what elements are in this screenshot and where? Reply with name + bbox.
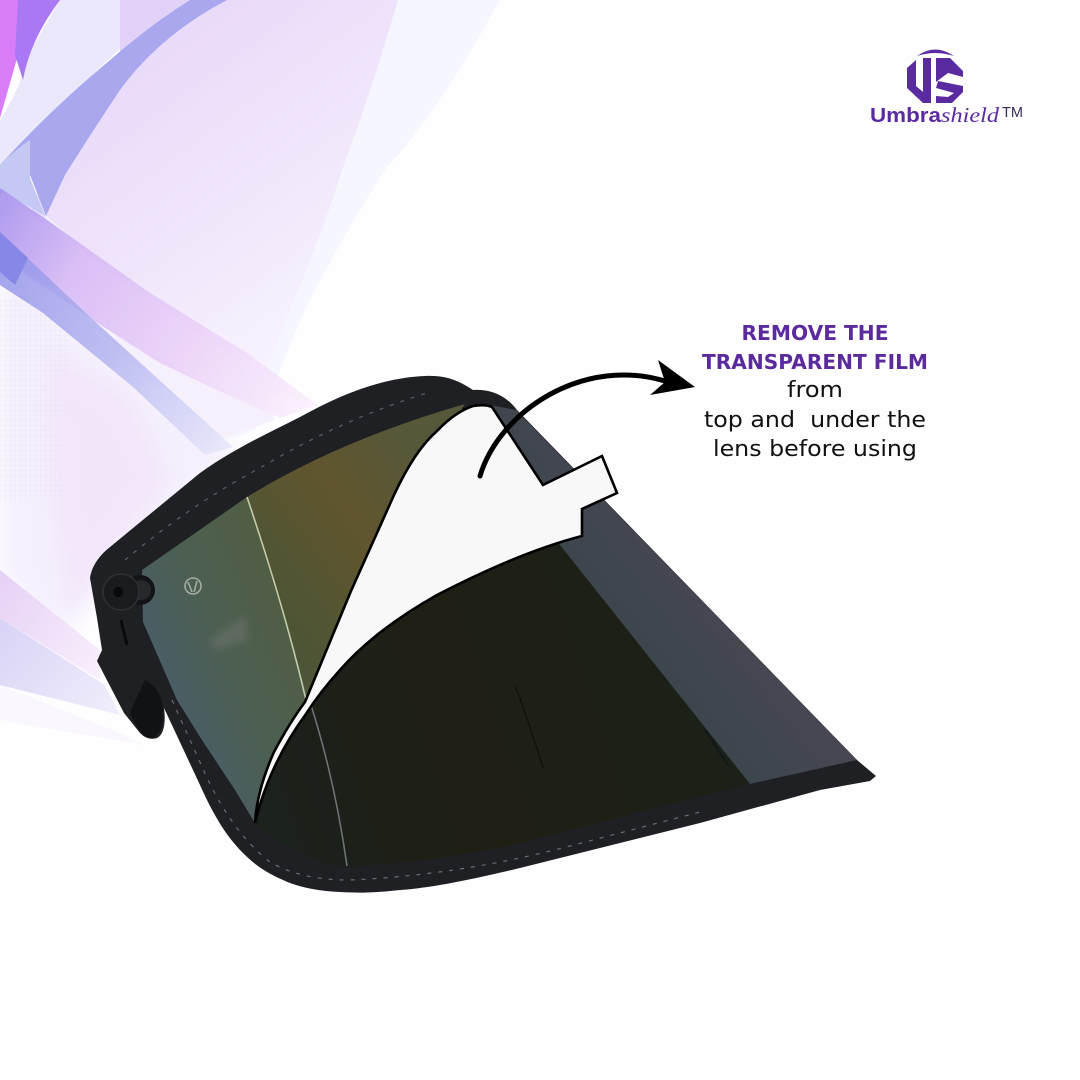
bolt: [103, 574, 155, 645]
visor band and clip: [90, 376, 876, 893]
lens: right strip: [490, 405, 857, 784]
lens reflection: [210, 615, 248, 650]
clip hook: [130, 680, 163, 738]
logo: Umbrashield: TM: [1002, 104, 1023, 121]
lens: left panel: [142, 497, 312, 823]
callout text: TRANSPARENT FILM: [702, 350, 928, 374]
lens: dark underside: [255, 540, 750, 867]
curved arrow: [480, 360, 695, 476]
logo wordmark: Umbra: [870, 105, 942, 127]
product: visor with peeled film: [90, 376, 876, 893]
logo: Umbrashield: [870, 50, 1023, 127]
callout text: [702, 321, 928, 462]
callout text: REMOVE THE: [742, 321, 888, 345]
logo mark: US shield: [907, 50, 963, 103]
lens logo watermark: [185, 578, 201, 594]
transparent film: [255, 405, 617, 823]
callout text: top and under the: [704, 408, 926, 433]
logo: Umbrashield: shield: [941, 103, 1000, 127]
callout text: from: [787, 378, 843, 403]
callout text: lens before using: [713, 437, 917, 462]
stitching: [125, 392, 430, 560]
lens: olive panel: [247, 404, 465, 705]
